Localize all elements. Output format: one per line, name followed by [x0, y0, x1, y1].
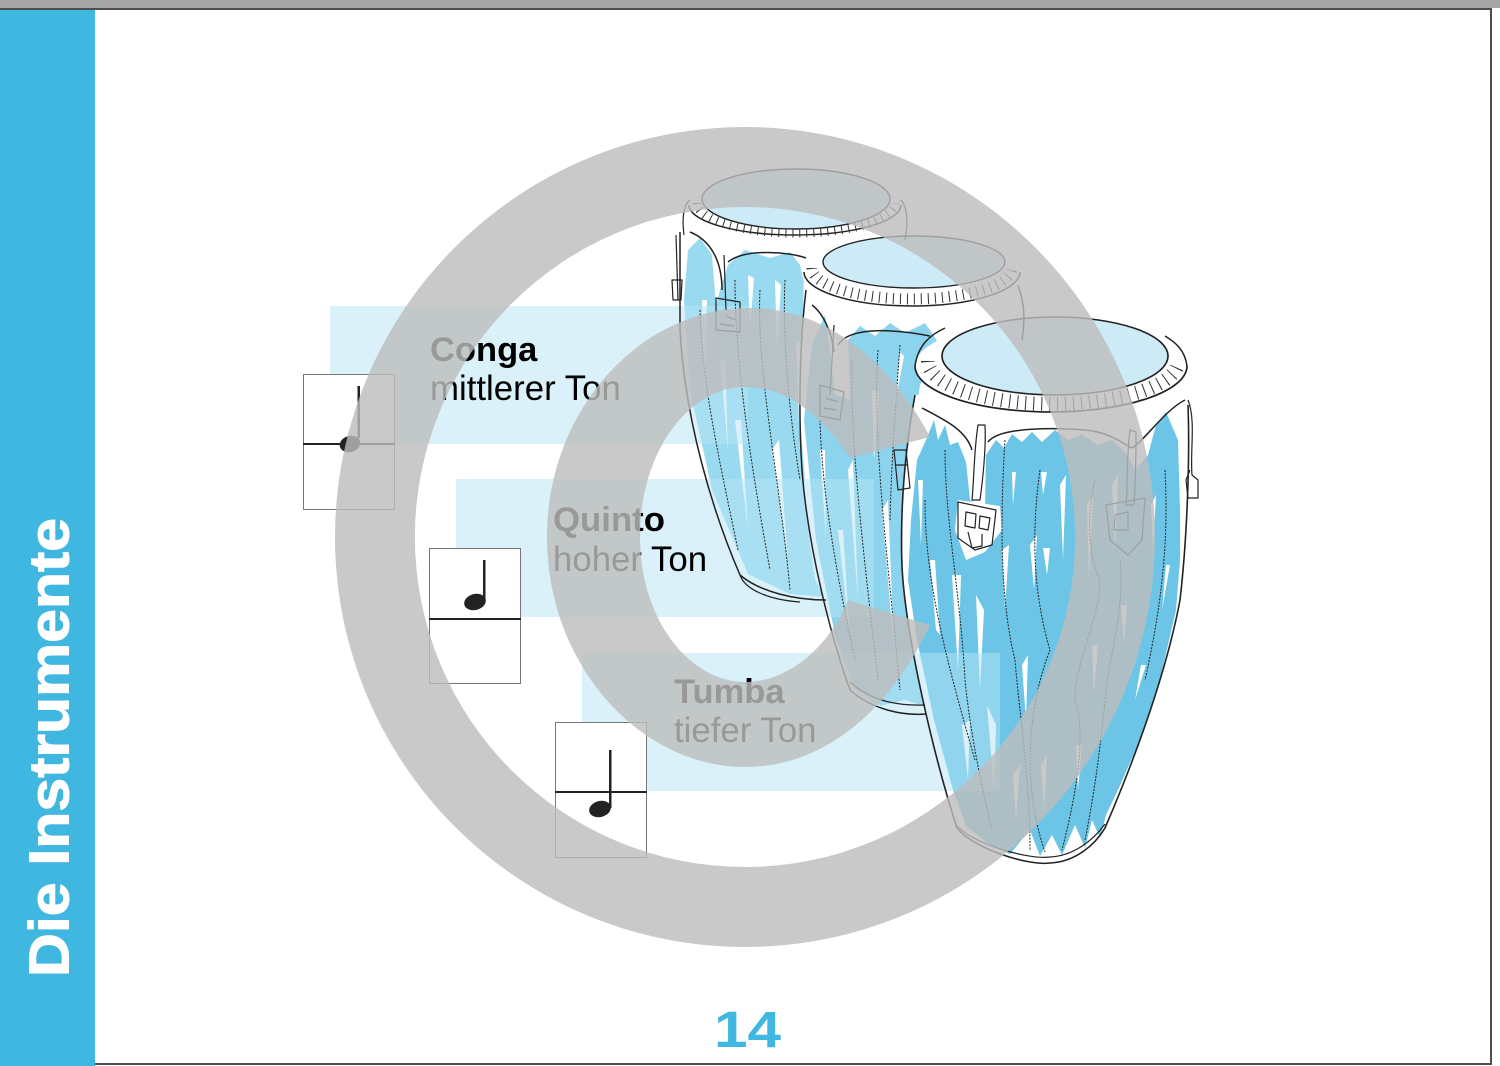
Conga description: mittlerer Ton	[430, 369, 621, 408]
sidebar	[0, 10, 95, 1066]
Tumba description: tiefer Ton	[674, 711, 817, 750]
label: Quinto	[553, 501, 707, 579]
copyright watermark	[335, 127, 1155, 947]
Tumba title: Tumba	[674, 673, 785, 711]
label: Tumba	[674, 673, 817, 750]
wood grain lines	[925, 440, 1166, 852]
middle drum fill	[800, 236, 1025, 714]
middle drum outline	[800, 236, 1024, 714]
watermark letter C	[547, 308, 930, 767]
page number: 14	[714, 1001, 782, 1058]
rear drum outline	[672, 169, 907, 602]
sidebar title: Die Instrumente	[18, 518, 82, 977]
Conga title: Conga	[430, 331, 538, 369]
conga drum colour fills	[680, 169, 1189, 863]
pale blue label bands	[330, 306, 1000, 791]
conga drum outlines	[672, 169, 1198, 863]
rear drum fill	[680, 169, 901, 600]
note card: Quinto, note above the line	[429, 548, 521, 684]
note card: Conga, note on the line	[303, 374, 395, 510]
Quinto title: Quinto	[553, 501, 665, 539]
note card: Tumba, note below the line	[555, 722, 647, 858]
front drum outline	[902, 317, 1198, 863]
tension rods and lugs	[958, 400, 1198, 555]
Quinto description: hoher Ton	[553, 540, 707, 579]
label: Conga	[430, 331, 621, 408]
front drum fill	[902, 317, 1189, 863]
watermark ring	[335, 127, 1155, 947]
